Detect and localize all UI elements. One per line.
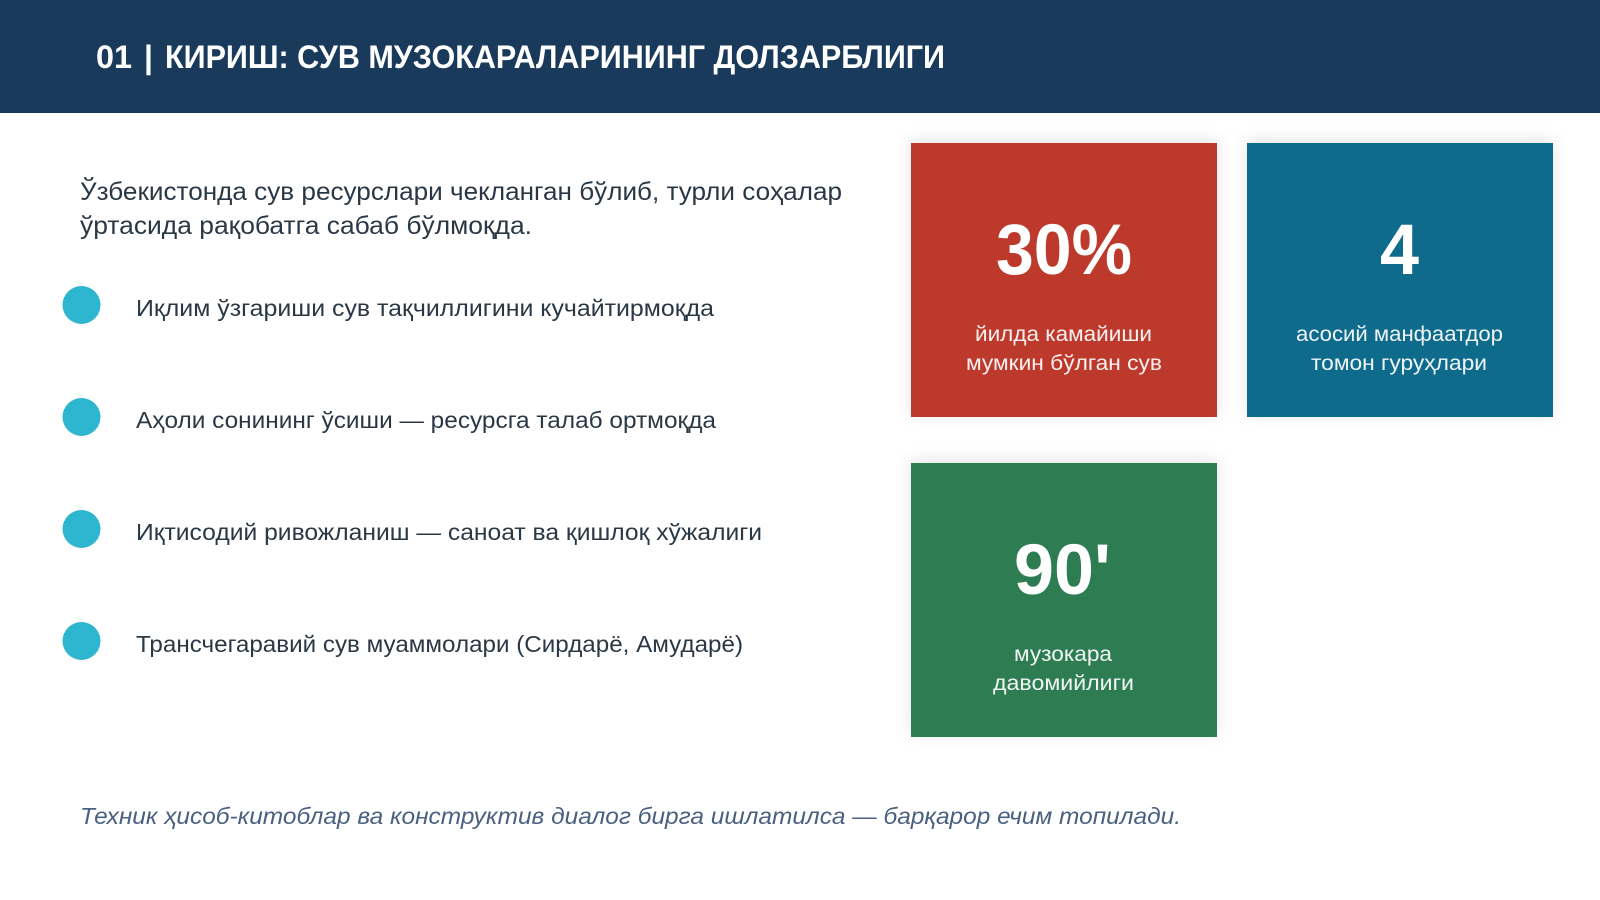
bullet 2 (62, 398, 716, 436)
stat card: 30% (911, 143, 1217, 417)
header band (0, 0, 1600, 113)
bullet 3 (62, 510, 762, 548)
stat card: 30%: йилда камайиши (975, 323, 1152, 346)
stat card: 90' (911, 463, 1217, 737)
footer note: Техник ҳисоб-китоблар ва конструктив диалог бирга ишлатилса — барқарор ечим топилади. (80, 803, 1181, 829)
title: КИРИШ: СУВ МУЗОКАРАЛАРИНИНГ ДОЛЗАРБЛИГИ (165, 39, 945, 75)
bullet 1: Иқлим ўзгариши сув тақчиллигини кучайтирмоқда (136, 295, 714, 321)
intro text: Ўзбекистонда сув ресурслари чекланган бўлиб, турли соҳалар (80, 176, 842, 206)
bullet 1 (62, 286, 714, 324)
intro text (80, 176, 842, 240)
stat card: 30%: 30% (996, 211, 1132, 290)
bullet 3: Иқтисодий ривожланиш — саноат ва қишлоқ хўжалиги (136, 519, 762, 545)
title: | (144, 39, 153, 75)
stat card: 30%: мумкин бўлган сув (966, 352, 1162, 375)
stat card: 4: асосий манфаатдор (1296, 323, 1503, 346)
bullet 2: Аҳоли сонининг ўсиши — ресурсга талаб ортмоқда (136, 407, 716, 433)
stat card: 90': 90' (1014, 531, 1111, 610)
intro text: ўртасида рақобатга сабаб бўлмоқда. (80, 212, 532, 240)
bullet 4: Трансчегаравий сув муаммолари (Сирдарё, Амударё) (136, 631, 743, 657)
stat card: 4: томон гуруҳлари (1311, 352, 1487, 375)
stat card: 90': давомийлиги (993, 672, 1134, 695)
bullet 4 (62, 622, 743, 660)
stat card: 4: 4 (1380, 211, 1419, 290)
stat card: 90': музокара (1014, 643, 1112, 666)
stat card: 4 (1247, 143, 1553, 417)
title: 01 (96, 39, 132, 75)
